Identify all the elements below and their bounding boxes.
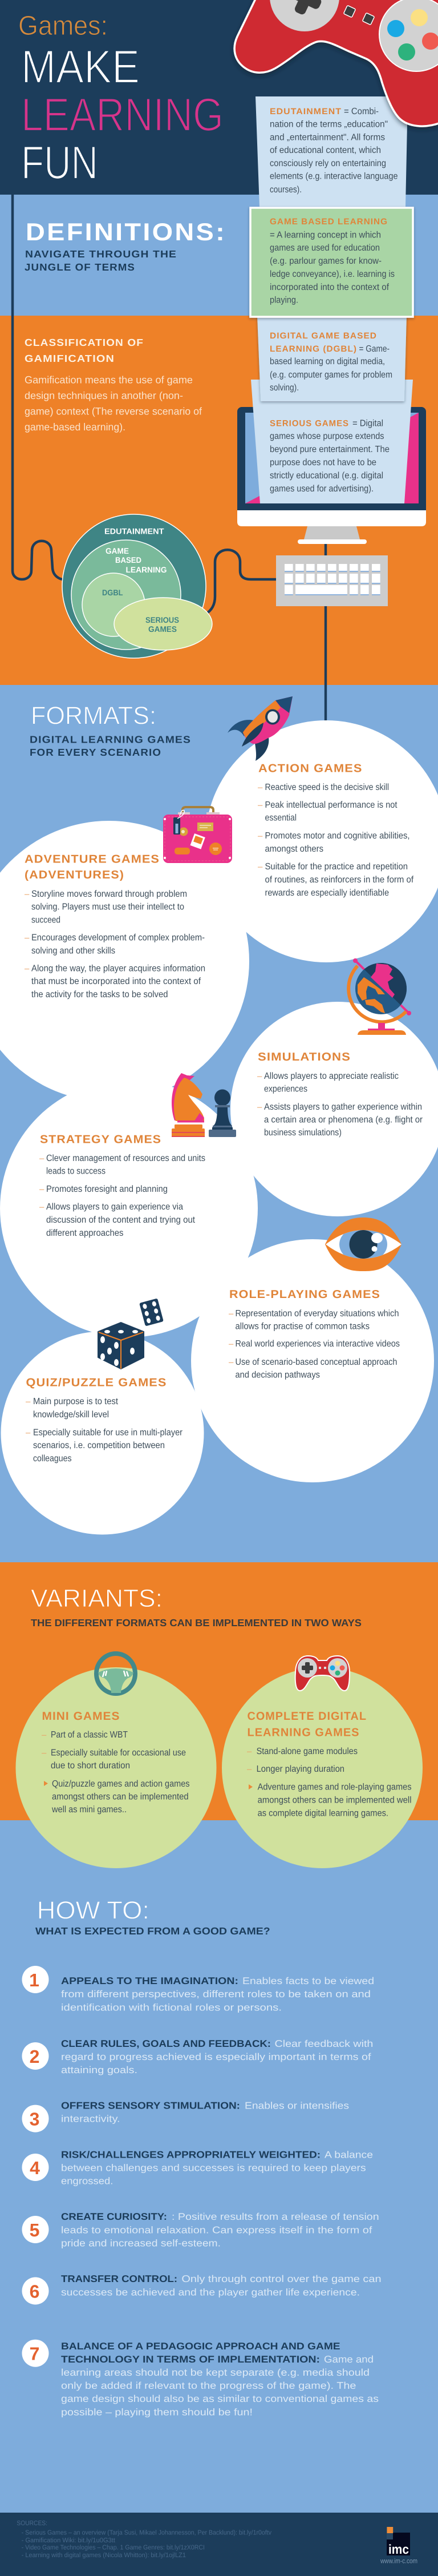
footer: sources: - Gamification Wiki: bit.ly/1u0G3tt — [22, 2537, 116, 2544]
panel: edutainment — [256, 96, 408, 207]
item 7: balance of pedagogy and technology: 7 — [30, 2344, 39, 2364]
panel: mini games — [42, 1710, 189, 1815]
item 7: balance of pedagogy and technology — [22, 2340, 379, 2418]
list: mini games: Especially suitable for occasional use — [51, 1748, 186, 1758]
item 5: create curiosity: leads to emotional relaxation. Can express itself in the form of — [61, 2225, 372, 2236]
item 3: offers sensory stimulation: 3 — [30, 2109, 39, 2130]
item 4: risk/challenges appropriately weighted: RISK/CHALLENGES APPROPRIATELY WEIGHTED: — [61, 2150, 321, 2160]
list: action games: – — [258, 783, 263, 792]
list: strategy games — [39, 1154, 205, 1238]
panel shape: simulations — [230, 1002, 438, 1216]
icon: globe — [348, 958, 411, 1035]
text: gamification definition: Gamification means the use of game — [25, 374, 193, 386]
heading: complete digital learning games: LEARNING GAMES — [248, 1727, 359, 1739]
item 7: balance of pedagogy and technology: BALANCE OF A PEDAGOGIC APPROACH AND GAME — [61, 2341, 340, 2352]
list: simulations: a certain area or phenomena (e.g. flight or — [264, 1115, 423, 1125]
list: strategy games: – — [39, 1154, 44, 1163]
list: role-playing games: – — [229, 1339, 234, 1349]
item 7: balance of pedagogy and technology: possible – playing them should be fun! — [61, 2407, 253, 2418]
item 2: clear rules, goals and feedback: regard to progress achieved is especially important in terms of — [61, 2051, 371, 2062]
title: MAKE — [21, 41, 140, 93]
text: dgbl definition: (e.g. computer games for problem — [270, 370, 392, 380]
chart: venn diagram of terms: EDUTAINMENT — [104, 527, 164, 536]
text: game based learning definition: games are used for education — [270, 243, 380, 253]
list: mini games: – — [42, 1730, 47, 1740]
list: strategy games: Clever management of resources and units — [46, 1154, 205, 1163]
heading: dgbl: DIGITAL GAME BASED — [270, 331, 377, 341]
list: role-playing games: Use of scenario-based conceptual approach — [235, 1357, 397, 1367]
item 2: clear rules, goals and feedback: Clear feedback with — [275, 2038, 373, 2049]
background: header band — [0, 0, 438, 195]
list: mini games: due to short duration — [51, 1761, 130, 1771]
heading: simulations: SIMULATIONS — [258, 1051, 351, 1063]
list: adventure games: Storyline moves forward through problem — [31, 889, 187, 899]
icon: dice — [98, 1298, 164, 1369]
heading: variants: VARIANTS: — [31, 1585, 163, 1612]
footer: sources: - Video Game Technologies – Chap. 1 Game Genres: bit.ly/1zX0RCI — [22, 2545, 205, 2551]
panel: simulations — [257, 1051, 423, 1138]
item 6: transfer control: Only through control over the game can — [181, 2273, 382, 2284]
item 1: appeals to the imagination: identification with fictional roles or persons. — [61, 2002, 282, 2013]
text: game based learning definition: ledge conveyance), i.e. learning is — [270, 269, 395, 279]
list: action games: Promotes motor and cognitive abilities, — [265, 831, 409, 841]
list: quiz/puzzle games: knowledge/skill level — [33, 1410, 109, 1420]
panel shape: adventure games — [0, 821, 249, 1102]
text: edutainment definition — [270, 107, 398, 195]
footer: sources: - Learning with digital games (Nicola Whitton): bit.ly/1ojlLZ1 — [22, 2552, 186, 2559]
list: quiz/puzzle games: Main purpose is to test — [33, 1397, 119, 1406]
text: serious games definition: strictly educational (e.g. digital — [270, 471, 383, 481]
list: action games: Suitable for the practice and repetition — [265, 862, 408, 872]
list: action games: – — [258, 800, 263, 810]
heading: mini games: MINI GAMES — [42, 1710, 120, 1723]
item 4: risk/challenges appropriately weighted — [22, 2150, 373, 2187]
chart: venn diagram of terms: DGBL — [102, 588, 123, 597]
list: quiz/puzzle games: – — [26, 1428, 31, 1438]
icon: steering wheel — [96, 1654, 135, 1694]
panel shape: role-playing games — [191, 1239, 434, 1482]
list: strategy games: Allows players to gain experience via — [46, 1202, 183, 1212]
list: simulations: – — [257, 1071, 262, 1081]
list: quiz/puzzle games: Especially suitable for use in multi-player — [33, 1428, 183, 1438]
chart: venn diagram of terms: GAMES — [148, 624, 177, 634]
list: adventure games: that must be incorporated into the context of — [31, 977, 201, 986]
list: complete digital learning games: Stand-alone game modules — [257, 1747, 358, 1756]
list: mini games: amongst others can be implemented — [52, 1792, 189, 1802]
panel: game based learning — [250, 208, 413, 317]
list: complete digital learning games: Adventure games and role-playing games — [258, 1783, 412, 1792]
list: action games: – — [258, 831, 263, 841]
panel: complete digital learning games — [247, 1710, 412, 1819]
text: serious games definition: purpose does not have to be — [270, 458, 376, 467]
title: Games: — [18, 11, 108, 41]
panel: strategy games — [39, 1134, 205, 1238]
list: adventure games: Along the way, the player acquires information — [31, 964, 205, 974]
list: action games: Peak intellectual performance is not — [265, 800, 398, 810]
item 5: create curiosity: 5 — [30, 2220, 39, 2240]
icon: keyboard — [276, 555, 388, 606]
panel shape: action games — [205, 720, 438, 962]
list: complete digital learning games: Longer playing duration — [257, 1764, 344, 1774]
icon: suitcase — [163, 807, 232, 863]
item 7: balance of pedagogy and technology: Game and — [324, 2354, 374, 2365]
footer: sources — [17, 2520, 271, 2559]
item 5: create curiosity — [22, 2211, 379, 2249]
list: complete digital learning games — [247, 1747, 412, 1819]
list: complete digital learning games: – — [247, 1764, 252, 1774]
item 4: risk/challenges appropriately weighted: between challenges and successes is required to keep players — [61, 2163, 366, 2174]
list: simulations: business simulations) — [264, 1128, 342, 1138]
list: simulations: Allows players to appreciate realistic — [264, 1071, 399, 1081]
item 6: transfer control — [22, 2273, 382, 2305]
title — [18, 11, 224, 189]
panel shape: strategy games — [0, 1079, 258, 1337]
text: gamification definition: game-based learning). — [25, 421, 125, 433]
subheading: how to: WHAT IS EXPECTED FROM A GOOD GAME? — [35, 1925, 270, 1937]
chart: venn diagram of terms: GAME — [106, 546, 129, 555]
list: adventure games: Encourages development of complex problem- — [31, 933, 205, 943]
heading: dgbl — [270, 331, 377, 354]
heading: complete digital learning games: COMPLETE DIGITAL — [248, 1710, 367, 1723]
heading: definitions: DEFINITIONS: — [26, 219, 226, 246]
text: edutainment definition: consciously rely on entertaining — [270, 159, 386, 168]
text: serious games definition: games whose purpose extends — [270, 432, 384, 441]
text: game based learning definition: incorporated into the context of — [270, 283, 390, 292]
list: action games: Reactive speed is the decisive skill — [265, 783, 389, 792]
heading: game based learning: GAME BASED LEARNING — [270, 217, 388, 227]
subheading: definitions: NAVIGATE THROUGH THE — [25, 248, 177, 260]
list: quiz/puzzle games: scenarios, i.e. competition between — [33, 1441, 165, 1450]
panel shape: mini games — [16, 1667, 217, 1868]
list: strategy games: different approaches — [46, 1228, 123, 1238]
heading: classification of gamification: CLASSIFICATION OF — [25, 337, 144, 348]
text: gamification definition: design techniques in another (non- — [25, 390, 183, 401]
icon: monitor cable — [325, 544, 327, 555]
heading: adventure games — [25, 853, 160, 881]
subheading: formats: FOR EVERY SCENARIO — [30, 747, 161, 758]
item 1: appeals to the imagination: APPEALS TO THE IMAGINATION: — [61, 1976, 238, 1986]
list: action games — [258, 783, 414, 898]
heading: formats: FORMATS: — [31, 702, 156, 729]
list: mini games: Quiz/puzzle games and action games — [52, 1779, 189, 1789]
item 1: appeals to the imagination: from different perspectives, different roles to be taken on and — [61, 1989, 371, 1999]
list: action games: amongst others — [265, 844, 323, 854]
item 2: clear rules, goals and feedback: attaining goals. — [61, 2065, 137, 2075]
panel: action games — [258, 763, 414, 898]
heading: strategy games: STRATEGY GAMES — [40, 1134, 161, 1146]
subheading: variants: THE DIFFERENT FORMATS CAN BE IMPLEMENTED IN TWO WAYS — [31, 1617, 362, 1628]
chart: venn diagram of terms: LEARNING — [125, 565, 167, 574]
icon: chess pieces — [172, 1073, 236, 1137]
list: adventure games: – — [25, 933, 30, 943]
connector cable: right — [205, 550, 277, 614]
item 5: create curiosity: pride and increased self-esteem. — [61, 2238, 221, 2249]
item 1: appeals to the imagination — [22, 1966, 374, 2013]
list: role-playing games — [229, 1309, 400, 1380]
item 2: clear rules, goals and feedback: 2 — [30, 2046, 39, 2067]
text: game based learning definition: (e.g. parlour games for know- — [270, 256, 382, 266]
logo: imc — [380, 2527, 417, 2565]
background: definitions band — [0, 195, 438, 316]
background: classification band — [0, 316, 438, 685]
list: role-playing games: – — [229, 1309, 234, 1319]
heading: how to: HOW TO: — [37, 1897, 149, 1925]
list: adventure games: – — [25, 964, 30, 974]
footer: sources: SOURCES: — [17, 2520, 47, 2527]
list: quiz/puzzle games: – — [26, 1397, 31, 1406]
list: mini games: well as mini games.. — [51, 1805, 127, 1815]
text: edutainment definition: courses). — [270, 185, 302, 195]
text: edutainment definition: and „entertainment". All forms — [270, 133, 385, 143]
panel shape: complete digital learning games — [222, 1667, 423, 1868]
list: adventure games: the activity for the tasks to be solved — [31, 990, 168, 999]
text: edutainment definition: = Combi- — [344, 107, 379, 116]
text: serious games definition: beyond pure entertainment. The — [270, 445, 390, 454]
list: simulations: Assists players to gather experience within — [264, 1102, 422, 1112]
list: action games: – — [258, 862, 263, 872]
item 5: create curiosity: : Positive results from a release of tension — [172, 2211, 379, 2222]
list: action games: essential — [265, 813, 297, 823]
heading: action games: ACTION GAMES — [258, 763, 363, 775]
item 3: offers sensory stimulation — [22, 2101, 349, 2132]
text: edutainment definition: nation of the terms „education" — [270, 120, 388, 130]
item 7: balance of pedagogy and technology: learning areas should not be kept separate (e.g. media should — [61, 2367, 370, 2378]
list: action games: of routines, as reinforcers in the form of — [265, 875, 414, 885]
panel: adventure games — [25, 853, 205, 999]
list: strategy games: – — [39, 1202, 44, 1212]
icon: eye — [325, 1218, 402, 1271]
heading: classification of gamification — [25, 337, 144, 364]
text: dgbl definition — [270, 344, 392, 393]
icon: monitor — [237, 407, 426, 544]
list: strategy games: leads to success — [46, 1167, 106, 1176]
list: quiz/puzzle games: colleagues — [33, 1454, 72, 1464]
icon: small game controller — [295, 1656, 350, 1691]
title: FUN — [21, 137, 98, 189]
title: LEARNING — [21, 89, 224, 141]
icon: rocket — [228, 696, 293, 761]
chart: venn diagram of terms — [62, 514, 212, 658]
list: role-playing games: allows for practise of common tasks — [235, 1322, 370, 1332]
list: adventure games: succeed — [31, 916, 60, 925]
item 2: clear rules, goals and feedback — [22, 2038, 373, 2075]
text: dgbl definition: solving). — [270, 383, 299, 393]
list: quiz/puzzle games — [26, 1397, 183, 1464]
item 4: risk/challenges appropriately weighted: A balance — [325, 2150, 373, 2160]
background: formats band — [0, 685, 438, 1562]
text: dgbl definition: based learning on digital media, — [270, 357, 385, 366]
icon: game controller — [234, 0, 438, 126]
panel: role-playing games — [229, 1288, 400, 1380]
heading: edutainment: EDUTAINMENT — [270, 107, 342, 116]
list: strategy games: – — [39, 1184, 44, 1194]
list: role-playing games: Real world experiences via interactive videos — [235, 1339, 400, 1349]
text: edutainment definition: elements (e.g. interactive language — [270, 171, 398, 182]
text: edutainment definition: of educational content, which — [270, 146, 381, 155]
list: strategy games: Promotes foresight and planning — [46, 1184, 168, 1194]
list: role-playing games: Representation of everyday situations which — [235, 1309, 399, 1319]
panel: digital game based learning — [257, 316, 407, 401]
list: role-playing games: and decision pathways — [235, 1370, 320, 1380]
text: gamification definition: game) context (The reverse scenario of — [25, 406, 202, 417]
footer: sources: - Serious Games – an overview (Tarja Susi, Mikael Johannesson, Per Backlund): bit.ly/1r0oftv — [22, 2530, 271, 2537]
item 1: appeals to the imagination: 1 — [29, 1970, 39, 1990]
logo: imc: imc — [388, 2542, 409, 2557]
list: mini games: – — [42, 1748, 47, 1758]
heading: dgbl: LEARNING (DGBL) — [270, 344, 357, 354]
connector cable: keyboard to action games — [325, 606, 327, 721]
background: variants band — [0, 1562, 438, 1820]
panel shape: quiz/puzzle games — [1, 1331, 204, 1534]
item 4: risk/challenges appropriately weighted: 4 — [30, 2158, 40, 2178]
item 3: offers sensory stimulation: interactivity. — [61, 2114, 120, 2125]
background: footer band — [0, 2513, 438, 2576]
text: gamification definition — [25, 374, 202, 433]
chart: venn diagram of terms: SERIOUS — [145, 615, 179, 624]
item 3: offers sensory stimulation: Enables or intensifies — [245, 2101, 349, 2111]
item 2: clear rules, goals and feedback: CLEAR RULES, GOALS AND FEEDBACK: — [61, 2038, 271, 2049]
text: serious games definition: games used for advertising). — [270, 484, 374, 494]
background: how-to band — [0, 1820, 438, 2513]
list: action games: rewards are especially identifiable — [265, 888, 389, 898]
list: adventure games: – — [25, 889, 30, 899]
text: game based learning definition — [270, 231, 395, 305]
panel: quiz/puzzle games — [26, 1377, 183, 1464]
list: adventure games — [25, 889, 205, 999]
item 3: offers sensory stimulation: OFFERS SENSORY STIMULATION: — [61, 2101, 240, 2111]
heading: serious games: SERIOUS GAMES — [270, 419, 349, 429]
item 7: balance of pedagogy and technology: only be added if relevant to the progress of the game). The — [61, 2380, 356, 2391]
list: role-playing games: – — [229, 1357, 234, 1367]
item 7: balance of pedagogy and technology: game design should also be as similar to conventional games as — [61, 2393, 379, 2404]
text: game based learning definition: = A learning concept in which — [270, 231, 381, 240]
heading: role-playing games: ROLE-PLAYING GAMES — [229, 1288, 380, 1301]
item 4: risk/challenges appropriately weighted: engrossed. — [61, 2176, 113, 2187]
subheading: definitions — [25, 248, 177, 273]
subheading: definitions: JUNGLE OF TERMS — [25, 261, 135, 273]
subheading: formats: DIGITAL LEARNING GAMES — [30, 734, 191, 745]
list: strategy games: discussion of the content and trying out — [46, 1215, 196, 1225]
heading: adventure games: ADVENTURE GAMES — [25, 853, 160, 866]
item 7: balance of pedagogy and technology: TECHNOLOGY IN TERMS OF IMPLEMENTATION: — [61, 2354, 320, 2365]
heading: quiz/puzzle games: QUIZ/PUZZLE GAMES — [26, 1377, 167, 1389]
item 1: appeals to the imagination: Enables facts to be viewed — [242, 1976, 374, 1986]
item 5: create curiosity: CREATE CURIOSITY: — [61, 2211, 167, 2222]
text: serious games definition — [270, 419, 390, 494]
heading: complete digital learning games — [248, 1710, 367, 1739]
text: dgbl definition: = Game- — [359, 344, 390, 354]
text: game based learning definition: playing. — [270, 296, 298, 305]
item 6: transfer control: TRANSFER CONTROL: — [61, 2273, 177, 2284]
list: adventure games: solving. Players must use their intellect to — [31, 902, 184, 912]
subheading: formats — [30, 734, 191, 758]
logo: imc: www.im-c.com — [380, 2557, 417, 2565]
list: simulations: experiences — [264, 1085, 307, 1094]
item 6: transfer control: 6 — [30, 2281, 39, 2301]
heading: classification of gamification: GAMIFICATION — [25, 353, 115, 364]
connector cable: left — [13, 195, 65, 580]
list: complete digital learning games: – — [247, 1747, 252, 1756]
list: simulations — [257, 1071, 423, 1138]
item 6: transfer control: successes be achieved and the player gather life experience. — [61, 2287, 360, 2298]
list: mini games: Part of a classic WBT — [51, 1730, 128, 1740]
list: simulations: – — [257, 1102, 262, 1112]
list: complete digital learning games: as complete digital learning games. — [258, 1809, 388, 1819]
list: complete digital learning games: amongst others can be implemented well — [258, 1796, 412, 1805]
list: adventure games: solving and other skills — [31, 946, 115, 956]
list: mini games — [42, 1730, 189, 1815]
heading: adventure games: (ADVENTURES) — [25, 869, 124, 881]
text: serious games definition: = Digital — [352, 419, 383, 429]
chart: venn diagram of terms: BASED — [115, 555, 141, 565]
panel: serious games — [251, 380, 413, 503]
